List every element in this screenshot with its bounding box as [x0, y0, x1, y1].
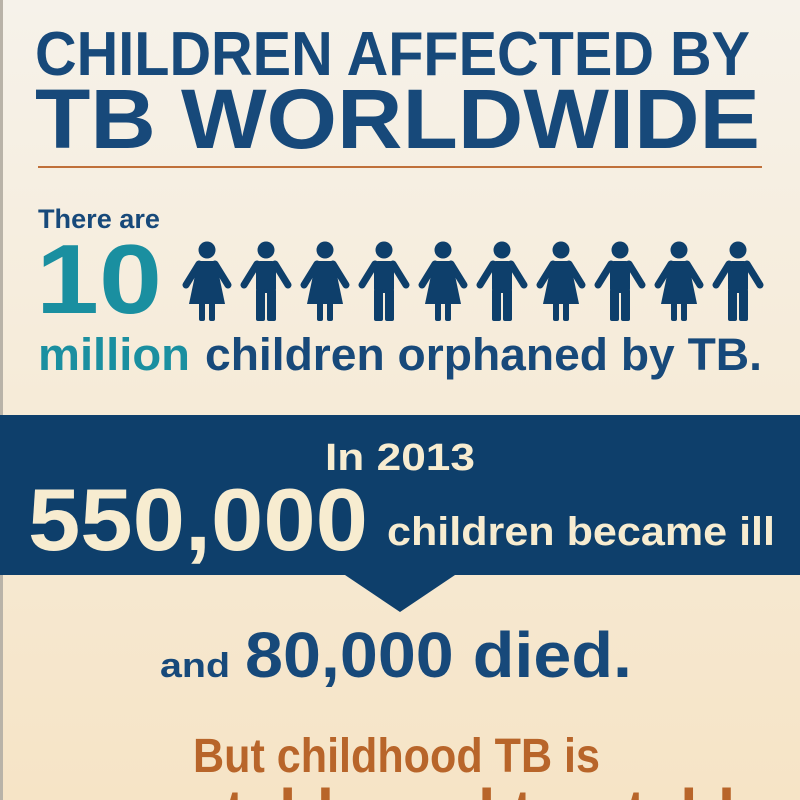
banner: 2013 illness: children became ill — [387, 510, 775, 554]
orphans stat: million — [38, 329, 190, 380]
banner: 2013 illness — [0, 415, 800, 612]
title — [35, 20, 760, 166]
closing statement — [22, 730, 790, 800]
orphans stat: There are — [38, 204, 160, 234]
icon: children figures — [186, 242, 760, 321]
deaths stat: 80,000 died. — [245, 619, 632, 691]
banner: 2013 illness: In 2013 — [325, 437, 475, 479]
title: TB WORLDWIDE — [35, 72, 760, 166]
title: CHILDREN AFFECTED BY — [35, 20, 750, 89]
orphans stat: children orphaned by TB. — [205, 329, 762, 380]
banner: 2013 illness: 550,000 — [28, 470, 368, 569]
deaths stat: and — [160, 647, 230, 685]
closing statement: But childhood TB is — [193, 730, 600, 783]
orphans stat: 10 — [36, 224, 162, 334]
orphans stat — [36, 204, 762, 380]
